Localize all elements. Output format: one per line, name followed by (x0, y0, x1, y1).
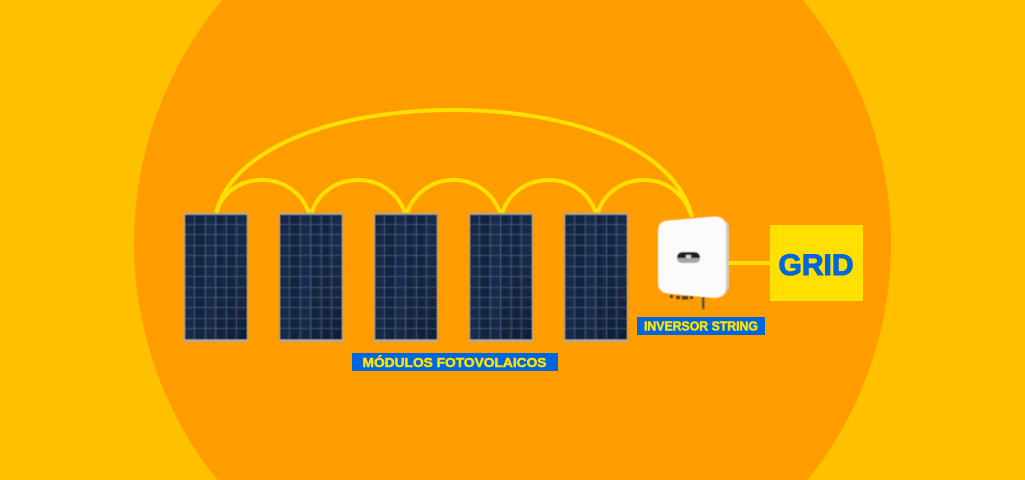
grid box (770, 225, 863, 301)
solar panel 2 (279, 213, 343, 342)
label: modulos fotovolaicos: MÓDULOS FOTOVOLAICOS (362, 355, 547, 370)
background circle (134, 0, 891, 480)
icon: string inverter (658, 216, 729, 309)
solar panel 4 (469, 213, 533, 342)
label: inversor string: INVERSOR STRING (644, 320, 758, 334)
solar panel 1 (184, 213, 248, 342)
grid label: GRID (778, 249, 854, 282)
solar panel 5 (564, 213, 628, 342)
wiring: arcs between modules and inverter (216, 110, 692, 217)
wire: inverter to grid (728, 261, 772, 265)
solar panel 3 (374, 213, 438, 342)
